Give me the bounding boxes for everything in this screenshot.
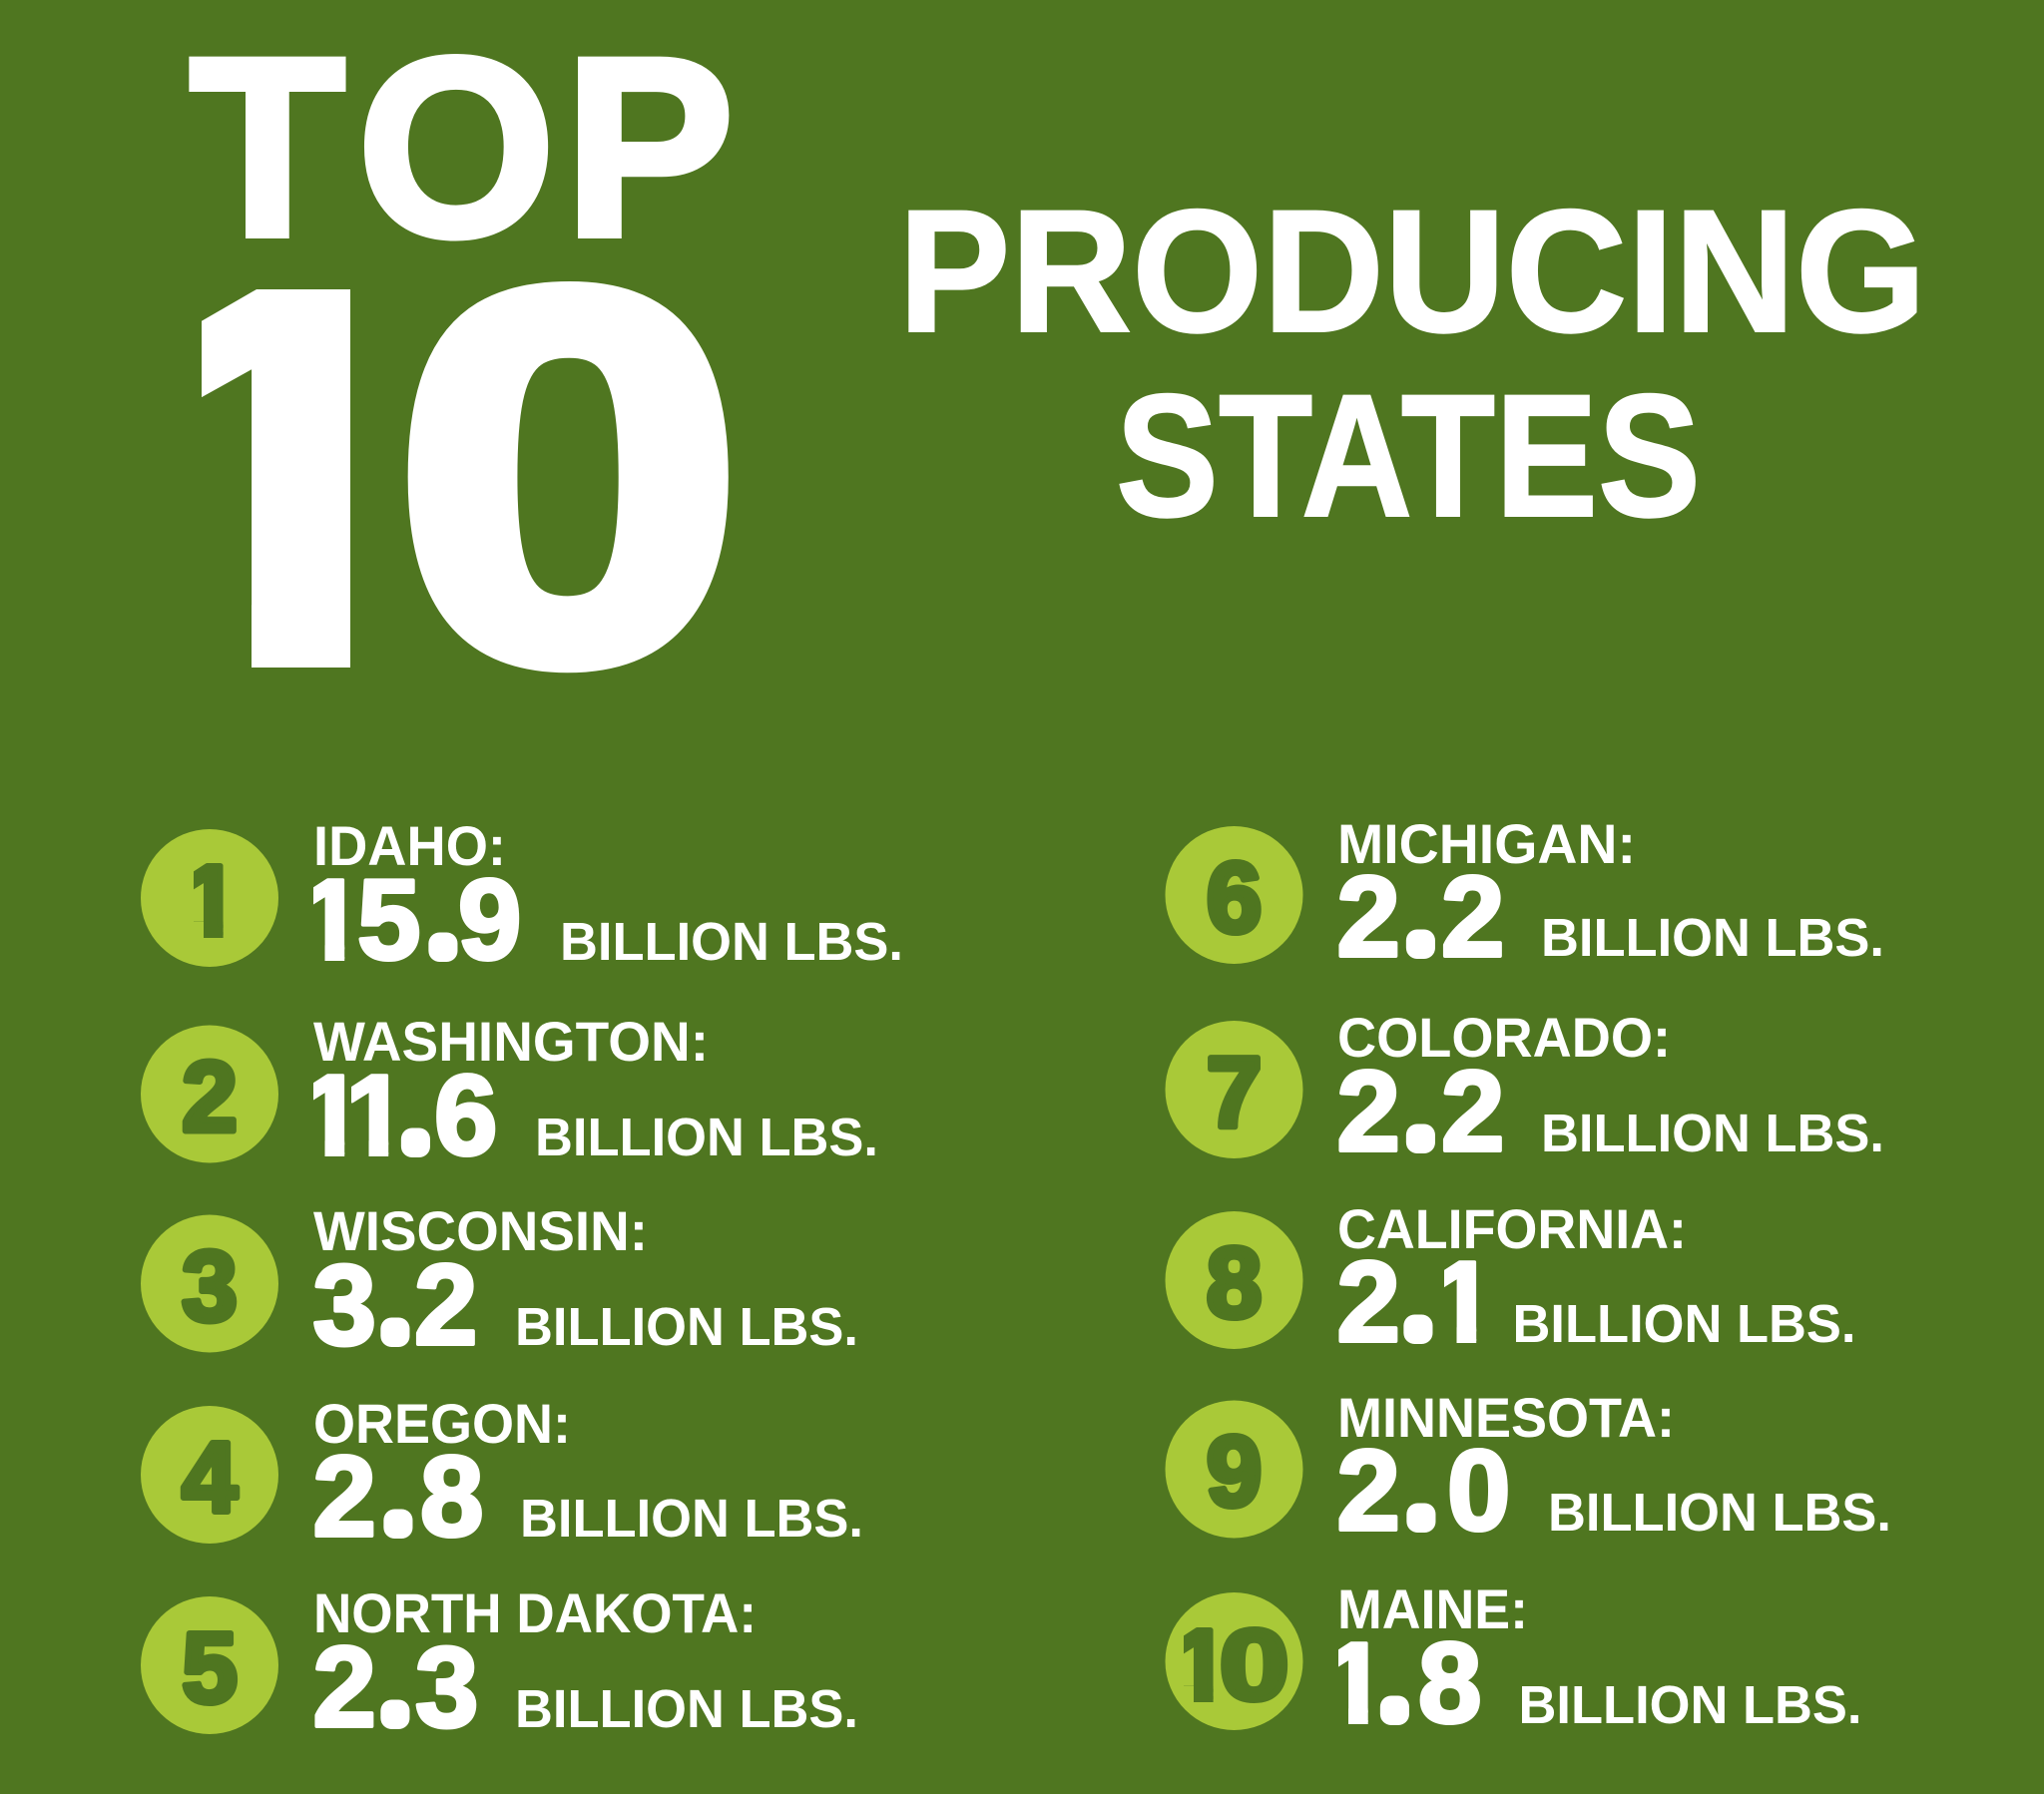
- state 5: North Dakota: NORTH DAKOTA:: [313, 1581, 757, 1644]
- title: TOP 10: [117, 6, 742, 783]
- state 9: Minnesota: .: [1414, 1477, 1428, 1533]
- state 6: Michigan: BILLION LBS.: [1541, 908, 1884, 968]
- state 4: Oregon: 2: [313, 1434, 376, 1561]
- state 6: Michigan: MICHIGAN:: [1337, 812, 1636, 875]
- state 10: Maine: .: [1387, 1669, 1401, 1725]
- state 2: Washington: 1: [300, 1053, 363, 1179]
- state 9: Minnesota: 9: [1207, 1416, 1262, 1528]
- state 7: Colorado: [1166, 1006, 1884, 1175]
- state 3: Wisconsin: [141, 1199, 858, 1369]
- state 6: Michigan: .: [1413, 903, 1427, 959]
- state 10: Maine: 1: [1174, 1609, 1229, 1721]
- heading line: PRODUCING: PRODUCING: [898, 175, 1926, 369]
- state 7: Colorado: 7: [1207, 1037, 1262, 1148]
- state 7: Colorado: BILLION LBS.: [1541, 1104, 1884, 1163]
- state 3: Wisconsin: .: [388, 1291, 402, 1347]
- state 1: Idaho: 5: [357, 857, 420, 984]
- state 10: Maine: 8: [1418, 1620, 1481, 1747]
- state 1: Idaho: 1: [300, 857, 363, 984]
- state 8: California: .: [1411, 1288, 1425, 1344]
- state 2: Washington: BILLION LBS.: [535, 1108, 878, 1167]
- state 2: Washington: 6: [434, 1053, 497, 1179]
- state 9: Minnesota: MINNESOTA:: [1337, 1386, 1675, 1449]
- state 4: Oregon: [141, 1392, 863, 1561]
- state 10: Maine: BILLION LBS.: [1519, 1675, 1862, 1735]
- state 3: Wisconsin: 3: [182, 1231, 238, 1343]
- title numeral: 10: [117, 175, 742, 783]
- state 1: Idaho: BILLION LBS.: [560, 912, 903, 972]
- title numeral: 10: 0: [395, 185, 742, 769]
- state 7: Colorado: COLORADO:: [1337, 1006, 1671, 1069]
- state 5: North Dakota: 3: [415, 1624, 478, 1751]
- state 4: Oregon: OREGON:: [313, 1392, 571, 1455]
- state 2: Washington: 1: [344, 1053, 407, 1179]
- state 1: Idaho: 1: [184, 845, 239, 957]
- state 5: North Dakota: 2: [313, 1624, 376, 1751]
- title word: TOP: TOP: [190, 6, 735, 289]
- state 10: Maine: 1: [1323, 1620, 1387, 1747]
- state 5: North Dakota: .: [388, 1673, 402, 1729]
- state 10: Maine: MAINE:: [1337, 1577, 1528, 1640]
- state 2: Washington: [141, 1022, 874, 1163]
- state 4: Oregon: 8: [420, 1434, 483, 1561]
- state 3: Wisconsin: WISCONSIN:: [313, 1199, 648, 1262]
- state 9: Minnesota: BILLION LBS.: [1548, 1483, 1891, 1543]
- state 1: Idaho: IDAHO:: [313, 814, 506, 877]
- state 9: Minnesota: [1166, 1386, 1891, 1555]
- heading line: STATES: STATES: [1116, 359, 1701, 554]
- state 1: Idaho: [141, 826, 900, 967]
- state 3: Wisconsin: 2: [414, 1242, 477, 1369]
- state 8: California: 1: [1432, 1239, 1495, 1366]
- state 3: Wisconsin: 3: [313, 1242, 376, 1369]
- state 6: Michigan: 2: [1337, 854, 1400, 981]
- state 4: Oregon: 4: [182, 1422, 238, 1534]
- state 6: Michigan: 6: [1207, 842, 1262, 954]
- state 2: Washington: WASHINGTON:: [313, 1010, 709, 1073]
- state 6: Michigan: [1166, 812, 1884, 981]
- state 8: California: 8: [1207, 1227, 1262, 1339]
- title numeral: 10: 1: [117, 175, 457, 783]
- state 5: North Dakota: BILLION LBS.: [515, 1679, 858, 1739]
- state 10: Maine: 0: [1220, 1609, 1289, 1720]
- state 8: California: CALIFORNIA:: [1337, 1197, 1687, 1260]
- state 2: Washington: 2: [182, 1042, 238, 1153]
- state 9: Minnesota: 0: [1447, 1428, 1510, 1555]
- state 7: Colorado: .: [1413, 1098, 1427, 1153]
- state 4: Oregon: .: [391, 1483, 405, 1539]
- state 8: California: 2: [1337, 1239, 1400, 1366]
- state 7: Colorado: 2: [1441, 1049, 1504, 1175]
- state 3: Wisconsin: BILLION LBS.: [515, 1297, 858, 1357]
- heading: PRODUCING STATES: [898, 175, 1926, 554]
- state 5: North Dakota: 5: [182, 1612, 238, 1724]
- state 1: Idaho: .: [436, 906, 450, 962]
- state 8: California: BILLION LBS.: [1513, 1294, 1856, 1354]
- state 9: Minnesota: 2: [1337, 1428, 1400, 1555]
- state 4: Oregon: BILLION LBS.: [520, 1489, 863, 1549]
- state 1: Idaho: 9: [458, 857, 521, 984]
- state 6: Michigan: 2: [1441, 854, 1504, 981]
- state 7: Colorado: 2: [1337, 1049, 1400, 1175]
- state 5: North Dakota: [141, 1581, 858, 1751]
- state 8: California: [1166, 1209, 1852, 1349]
- state 10: Maine: [1166, 1590, 1858, 1730]
- state 2: Washington: .: [409, 1102, 422, 1157]
